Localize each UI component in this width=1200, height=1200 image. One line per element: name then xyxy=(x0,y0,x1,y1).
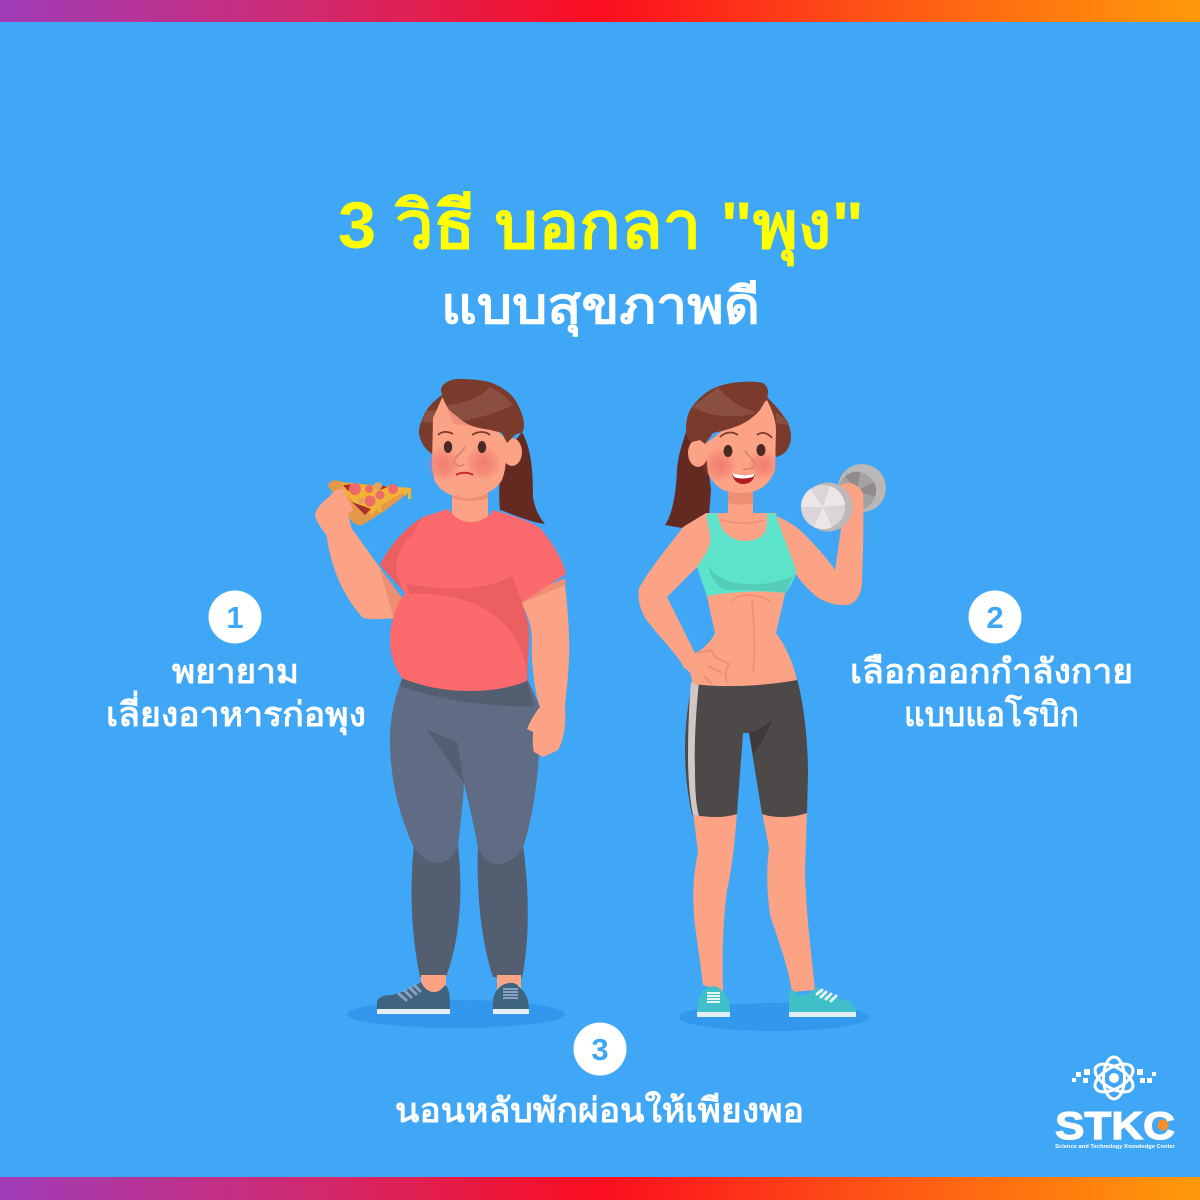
dumbbell back weight xyxy=(838,464,886,512)
tip 2 xyxy=(850,590,1133,734)
shirt xyxy=(380,509,566,691)
top gradient band xyxy=(0,0,1200,22)
cheeks xyxy=(703,448,737,482)
right shoe xyxy=(789,987,856,1017)
atom icon xyxy=(1072,1057,1156,1099)
back hair xyxy=(419,395,445,454)
face xyxy=(705,400,776,493)
subtitle: แบบสุขภาพดี xyxy=(441,278,760,337)
shorts shade xyxy=(749,718,773,755)
hair highlight xyxy=(693,387,757,416)
number badge 2: 2 xyxy=(986,600,1004,635)
STKC wordmark: STKC xyxy=(1055,1105,1175,1148)
pants crotch shade xyxy=(427,730,464,783)
pizza slice xyxy=(328,480,412,525)
ear xyxy=(502,438,522,466)
title: 3 วิธี บอกลา "พุง" xyxy=(338,188,864,267)
hair top xyxy=(441,379,524,443)
hair top xyxy=(686,382,768,444)
number badge 3: 3 xyxy=(591,1032,609,1067)
back hair highlight xyxy=(422,410,436,423)
cheeks xyxy=(426,447,460,481)
smile xyxy=(732,473,755,484)
right leg xyxy=(762,812,815,992)
bottom gradient band xyxy=(0,1177,1200,1200)
right leg lower xyxy=(478,845,528,978)
logo tagline: Science and Technology Knowledge Center xyxy=(1055,1144,1176,1150)
eyes xyxy=(444,441,452,453)
number badge 3 xyxy=(574,1022,626,1076)
left arm xyxy=(326,520,402,619)
sports top shade xyxy=(708,565,793,593)
ground shadow xyxy=(347,1000,565,1028)
STKC logo xyxy=(1055,1057,1176,1150)
left leg xyxy=(693,812,737,992)
orange dot xyxy=(1158,1120,1168,1130)
arm shade xyxy=(380,568,402,618)
ankles xyxy=(421,975,521,992)
hand holding pizza xyxy=(315,489,353,537)
eyebrows xyxy=(438,432,490,435)
ponytail xyxy=(665,432,711,529)
neck xyxy=(452,490,488,526)
number badge 1 xyxy=(208,590,262,644)
abdominal lines xyxy=(732,595,770,672)
pants waist shade xyxy=(400,680,534,706)
shorts xyxy=(685,679,808,817)
tip 1 text: เลี่ยงอาหารก่อพุง xyxy=(106,690,366,736)
tip 1 xyxy=(106,590,366,736)
dumbbell front weight xyxy=(801,482,852,532)
right arm xyxy=(777,483,863,605)
left shoe xyxy=(697,986,730,1017)
illustration: fit woman with dumbbell xyxy=(638,382,886,1031)
right shoe xyxy=(493,983,529,1014)
tip 1 text: พยายาม xyxy=(172,653,299,691)
sports top xyxy=(697,513,796,596)
tip 2 text: แบบแอโรบิก xyxy=(904,694,1079,734)
ponytail xyxy=(499,432,545,524)
ground shadow xyxy=(679,1003,869,1031)
left shoe xyxy=(377,982,450,1014)
back hair highlight xyxy=(776,413,789,425)
back hair xyxy=(760,395,791,457)
mouth xyxy=(456,473,473,475)
number badge 1: 1 xyxy=(226,600,244,635)
left leg lower xyxy=(412,845,460,977)
hand on hip xyxy=(683,650,729,684)
tip 2 text xyxy=(850,653,1133,734)
nose xyxy=(743,450,755,469)
torso and left arm xyxy=(638,513,797,686)
eyebrows xyxy=(720,433,772,438)
tip 3 xyxy=(395,1022,804,1130)
nose xyxy=(454,447,465,466)
right arm and hand xyxy=(520,584,569,757)
tip 3 text: นอนหลับพักผ่อนให้เพียงพอ xyxy=(395,1090,804,1130)
shirt belly shade xyxy=(405,575,529,680)
neck xyxy=(728,488,753,525)
tip 2 text: เลือกออกกำลังกาย xyxy=(850,653,1133,691)
shirt shade left xyxy=(380,517,423,593)
pants upper xyxy=(390,678,540,864)
forehead hair shadow xyxy=(446,402,470,426)
number badge 2 xyxy=(968,590,1022,644)
shorts stripe xyxy=(688,682,699,816)
sleeve hem shade xyxy=(520,578,566,603)
hair highlight xyxy=(447,387,513,421)
eyes xyxy=(724,445,732,457)
collar line xyxy=(720,520,765,523)
face xyxy=(432,398,507,498)
illustration: overweight woman with pizza xyxy=(315,379,569,1028)
tip 1 text xyxy=(106,653,366,736)
ear xyxy=(688,439,708,467)
